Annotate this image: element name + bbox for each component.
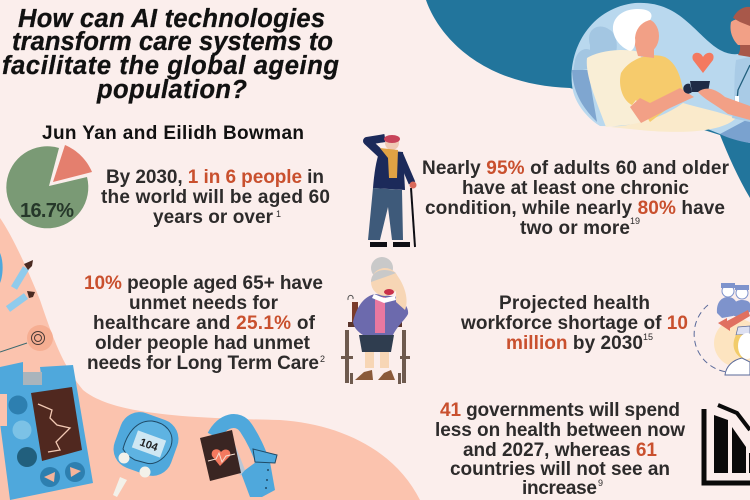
- background: teal blob top right: [426, 0, 750, 198]
- text: chronic conditions: condition, while nearly 80% have: [425, 198, 725, 219]
- illustration: elderly man with cane: [367, 135, 416, 247]
- text: workforce shortage: workforce shortage of 10: [460, 313, 688, 334]
- text: 1 in 6 people: the world will be aged 60: [101, 187, 330, 208]
- title: facilitate the global ageing: [2, 52, 339, 80]
- illustration: health workers icon: [694, 283, 750, 375]
- text: 1 in 6 people: years or over: [153, 207, 274, 228]
- text: 1 in 6 people: By 2030, 1 in 6 people in: [106, 167, 324, 188]
- text: unmet needs: healthcare and 25.1% of: [93, 313, 316, 334]
- title: transform care systems to: [12, 28, 333, 56]
- text: government spending: 41 governments will spend: [440, 400, 680, 421]
- text: unmet needs: needs for Long Term Care: [87, 353, 319, 374]
- authors: Jun Yan and Eilidh Bowman: [42, 123, 304, 144]
- illustration: glucose meter: 104: [138, 437, 160, 454]
- text: chronic conditions: [422, 158, 730, 239]
- text: 1 in 6 people: 1: [276, 209, 281, 219]
- text: government spending: 9: [598, 478, 603, 488]
- illustration: elderly woman in wheelchair: [341, 257, 410, 384]
- text: government spending: less on health between now: [435, 420, 685, 441]
- text: workforce shortage: million by 2030: [506, 333, 643, 354]
- text: unmet needs: unmet needs for: [129, 293, 279, 314]
- text: government spending: [435, 400, 685, 499]
- text: government spending: countries will not see an: [450, 459, 670, 480]
- text: unmet needs: [84, 273, 325, 374]
- text: government spending: and 2027, whereas 61: [463, 440, 657, 461]
- background: peach blob lower left: [0, 218, 420, 500]
- illustration: glucose meter: [108, 406, 184, 497]
- text: chronic conditions: two or more: [520, 218, 630, 239]
- title: population?: [96, 76, 247, 104]
- text: workforce shortage: [460, 293, 688, 354]
- pie chart: 16.7%: 16.7%: [20, 200, 74, 222]
- text: unmet needs: 2: [320, 354, 325, 364]
- text: unmet needs: 10% people aged 65+ have: [84, 273, 323, 294]
- illustration: insulin pump: [0, 362, 93, 500]
- text: chronic conditions: Nearly 95% of adults 60 and older: [422, 158, 730, 179]
- icon: declining bar chart: [704, 405, 750, 483]
- title: How can AI technologies: [18, 5, 325, 33]
- illustration: smart watch: [200, 421, 277, 497]
- text: 1 in 6 people: [101, 167, 330, 228]
- text: government spending: increase: [522, 478, 597, 499]
- text: chronic conditions: have at least one chronic: [462, 178, 689, 199]
- illustration: test strips and sensor: [0, 253, 53, 352]
- text: unmet needs: older people had unmet: [95, 333, 311, 354]
- text: chronic conditions: 19: [630, 216, 640, 226]
- title: [2, 5, 339, 104]
- text: workforce shortage: 15: [643, 332, 653, 342]
- pie chart: 16.7%: [6, 145, 92, 228]
- text: workforce shortage: Projected health: [499, 293, 650, 314]
- illustration: nurse caring for elderly patient: [572, 3, 750, 143]
